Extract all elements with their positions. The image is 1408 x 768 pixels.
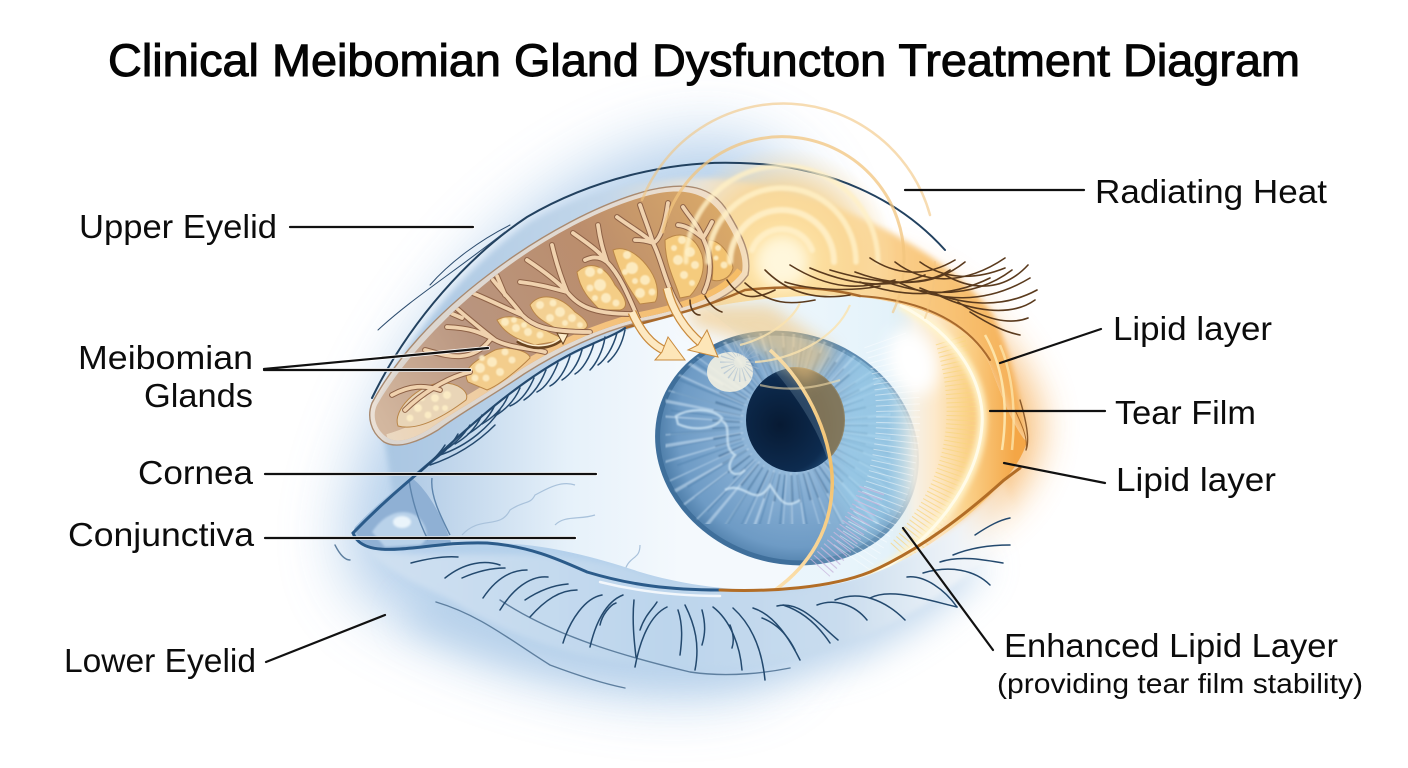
meibomian gland panel bbox=[370, 186, 749, 445]
upper lashes: outer lid bbox=[690, 258, 1037, 335]
title: Clinical Meibomian Gland Dysfuncton Treatment Diagram bbox=[108, 35, 1300, 86]
gland pockets bbox=[397, 235, 733, 427]
eye outline bbox=[335, 296, 1028, 688]
lens arc bbox=[770, 350, 832, 590]
label: Meibomian Glands bbox=[78, 339, 488, 414]
label: Lipid layer (upper): Lipid layer bbox=[1113, 310, 1272, 347]
label: Enhanced Lipid Layer: (providing tear film stability) bbox=[997, 668, 1363, 699]
lens and lipid layer overlay bbox=[690, 280, 1040, 590]
small curved arrow in gland bbox=[518, 333, 568, 348]
upper eyelid crease line bbox=[372, 163, 945, 398]
label: Lipid layer (upper) bbox=[1000, 310, 1272, 363]
label: Cornea: Cornea bbox=[138, 454, 254, 491]
label: Meibomian Glands: Meibomian bbox=[78, 339, 253, 376]
caruncle: inner corner tissue bbox=[355, 478, 452, 552]
corneal reflection highlight bbox=[707, 349, 753, 392]
oil flow arrow 1 bbox=[632, 312, 685, 360]
oil flow arrow 2 bbox=[667, 288, 718, 357]
label: Radiating Heat: Radiating Heat bbox=[1095, 173, 1327, 210]
label: Lipid layer (lower) bbox=[1004, 461, 1276, 498]
glandular lipid droplets bbox=[406, 236, 728, 422]
label: Lower Eyelid: Lower Eyelid bbox=[64, 642, 256, 679]
sclera bbox=[354, 296, 1027, 589]
gland outer sheath bbox=[370, 186, 749, 445]
tear film bright ring bbox=[865, 305, 982, 580]
label: Lower Eyelid bbox=[64, 615, 385, 679]
ducts bbox=[392, 203, 712, 410]
label: Conjunctiva: Conjunctiva bbox=[68, 516, 255, 553]
label: Tear Film: Tear Film bbox=[1115, 394, 1256, 431]
iris bbox=[655, 330, 919, 566]
lower orange rim bbox=[388, 272, 742, 440]
lower eyelid skin bbox=[365, 480, 1018, 669]
upper eyelid margin bbox=[625, 288, 860, 328]
heat arcs across the lens bbox=[740, 303, 850, 389]
label: Enhanced Lipid Layer: Enhanced Lipid Layer bbox=[1004, 627, 1338, 664]
label: Meibomian Glands: Glands bbox=[144, 377, 253, 414]
eyeball bbox=[354, 296, 1027, 589]
upper eyelid skin bbox=[378, 178, 1027, 505]
label: Lipid layer (lower): Lipid layer bbox=[1116, 461, 1276, 498]
label: Upper Eyelid: Upper Eyelid bbox=[79, 208, 277, 245]
heat glow behind the gland bbox=[667, 147, 897, 377]
label: Enhanced Lipid Layer bbox=[903, 528, 1363, 699]
upper lashes: inner lid bbox=[420, 328, 625, 472]
background glow: blue and orange halo bbox=[344, 137, 1041, 693]
pupil bbox=[746, 368, 844, 472]
lower lashes bbox=[411, 518, 1010, 680]
heat rings radiating above the eye bbox=[642, 104, 935, 318]
outer lipid arcs bbox=[985, 335, 1026, 450]
sclera veins bbox=[462, 484, 640, 570]
